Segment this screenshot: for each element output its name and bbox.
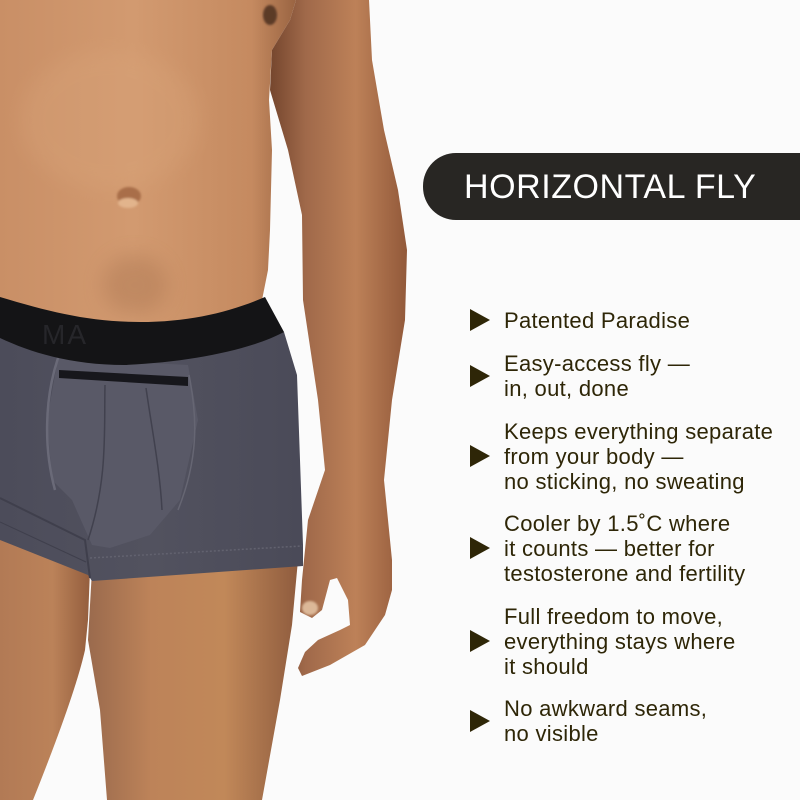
- bullet: patented paradise: Patented Paradise: [504, 308, 690, 333]
- bullet: easy-access fly: [470, 351, 690, 401]
- right thigh: [88, 560, 298, 800]
- nipple: [263, 5, 277, 25]
- bullet: seams: No awkward seams,: [504, 696, 707, 721]
- bullet: freedom: Full freedom to move,: [504, 604, 723, 629]
- bullet: keeps everything separate: Keeps everything separate: [504, 419, 773, 444]
- waistband logo: MA: [42, 319, 88, 350]
- title pill: [423, 153, 800, 220]
- bullet: seams: [470, 696, 707, 746]
- bullet: cooler: Cooler by 1.5˚C where: [504, 511, 730, 536]
- bullet: keeps everything separate: [470, 419, 773, 494]
- bullet: cooler: it counts — better for: [504, 536, 715, 561]
- left thigh: [0, 530, 90, 800]
- bullet: seams: no visible: [504, 721, 599, 746]
- arm and hand: [270, 0, 407, 676]
- pouch: [47, 358, 198, 548]
- thumb nail: [302, 601, 318, 615]
- bullet: cooler: testosterone and fertility: [504, 561, 745, 586]
- title pill: HORIZONTAL FLY: [464, 168, 756, 206]
- bullet: freedom: [470, 604, 736, 679]
- navel: [117, 187, 141, 208]
- bullet: freedom: everything stays where: [504, 629, 736, 654]
- bullet: keeps everything separate: no sticking, no sweating: [504, 469, 745, 494]
- bullet: freedom: it should: [504, 654, 589, 679]
- bullet: easy-access fly: in, out, done: [504, 376, 629, 401]
- waistband: [0, 297, 284, 365]
- bullet: cooler: [470, 511, 745, 586]
- bullet: keeps everything separate: from your body —: [504, 444, 684, 469]
- trunks: [0, 297, 303, 581]
- bullet: easy-access fly: Easy-access fly —: [504, 351, 690, 376]
- torso: [0, 0, 296, 335]
- fly opening: [59, 370, 188, 386]
